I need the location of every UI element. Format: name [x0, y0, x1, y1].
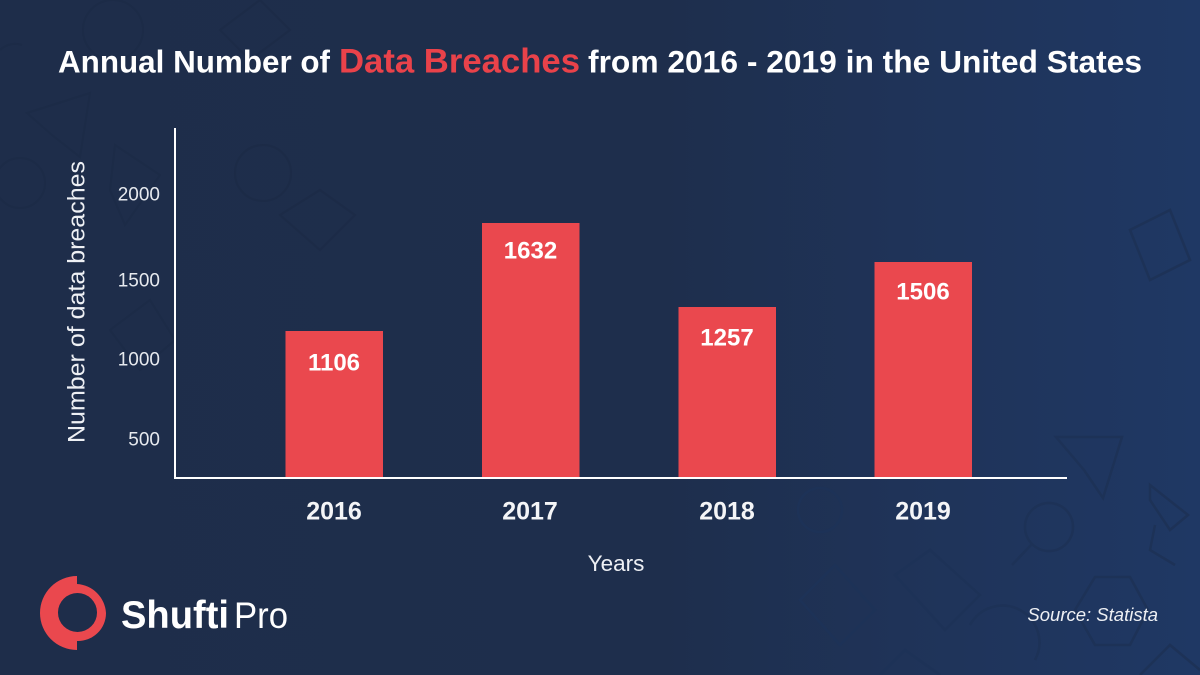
logo: Shufti Pro — [40, 576, 288, 650]
x axis year labels: 2017 — [502, 498, 558, 526]
source note: Source: Statista — [1027, 604, 1158, 625]
background icon pattern, right side — [798, 210, 1200, 675]
bar 2017 — [482, 223, 580, 477]
x axis year labels: 2018 — [699, 498, 755, 526]
title: Data Breaches — [339, 42, 580, 80]
bar 2017: 1632 — [504, 238, 557, 264]
x axis title: Years — [588, 551, 644, 576]
title: from 2016 - 2019 in the United States — [588, 44, 1142, 80]
title — [58, 42, 1142, 80]
x axis line — [174, 477, 1067, 479]
logo wordmark: Shufti — [121, 594, 229, 637]
title: Annual Number of — [58, 44, 331, 80]
bar 2018: 1257 — [700, 324, 754, 352]
y axis tick labels: 500 — [128, 430, 160, 450]
bar chart — [64, 128, 1067, 576]
logo: Shufti Pro: Pro — [234, 595, 288, 636]
y axis tick labels: 1500 — [118, 270, 160, 292]
bar 2019: 1506 — [896, 278, 950, 306]
background icon pattern, left side — [0, 0, 355, 370]
y axis tick labels — [118, 184, 160, 450]
y axis tick labels: 1000 — [118, 350, 160, 370]
bar 2016 — [286, 331, 383, 477]
y axis title: Number of data breaches — [64, 161, 90, 443]
x axis year labels: 2019 — [895, 498, 951, 526]
x axis year labels: 2016 — [306, 498, 362, 526]
y axis tick labels: 2000 — [118, 184, 160, 206]
bar 2018 — [678, 307, 776, 477]
y axis line — [174, 128, 176, 479]
x axis year labels — [306, 498, 951, 526]
bar 2019 — [874, 262, 972, 477]
bar 2016: 1106 — [308, 350, 360, 376]
icon: logo ring — [40, 576, 106, 650]
